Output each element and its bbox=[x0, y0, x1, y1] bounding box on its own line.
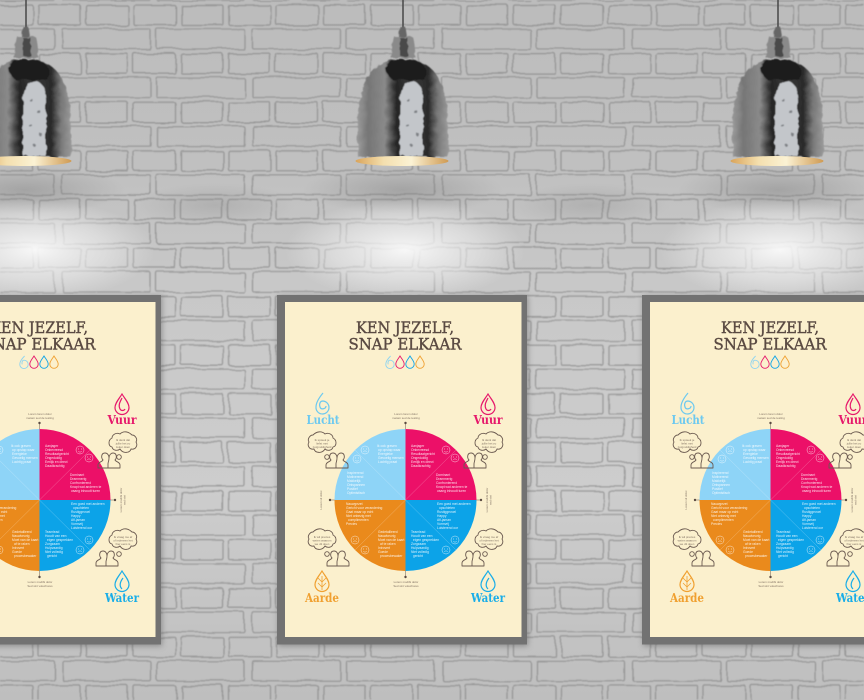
poster: right: Dominant bbox=[801, 473, 815, 477]
poster: left: hier eens is bbox=[116, 542, 131, 546]
poster: right: Rustiggevoel bbox=[802, 510, 821, 514]
poster: left: Confronterend bbox=[70, 481, 91, 485]
poster: left: af te raken bbox=[14, 542, 30, 546]
poster: left: Houdt van een bbox=[45, 534, 67, 538]
poster: right: eigen gesprekken bbox=[778, 538, 804, 542]
pie chart: four quadrants bbox=[334, 429, 476, 571]
poster: left: Teamlead bbox=[45, 530, 59, 534]
title: SNAP ELKAAR bbox=[348, 336, 463, 354]
quadrant text: Optimistisch bbox=[347, 491, 365, 495]
poster: left: Luisterend oor bbox=[71, 526, 93, 530]
title bbox=[348, 319, 463, 354]
quadrant text: Moet van de kaart bbox=[378, 538, 404, 542]
poster: left: Lorem lorem dolor bbox=[28, 412, 52, 416]
poster: left: eigen gesprekken bbox=[47, 538, 73, 542]
poster: left: gericht bbox=[47, 554, 57, 558]
poster: right: jullie het zo bbox=[846, 442, 862, 446]
poster: left: Moet van de kaart bbox=[12, 538, 38, 542]
poster: left: Lorem modibi dolor bbox=[119, 488, 123, 512]
poster: left: procesbewaker bbox=[14, 554, 37, 558]
poster: right: Ongeduldig bbox=[776, 456, 793, 460]
quadrant text: Introvert bbox=[378, 546, 390, 550]
poster: left: Ik denk dat bbox=[116, 438, 130, 442]
thought cloud text: Ik vraag me af bbox=[480, 535, 498, 539]
quadrant text: vaang inhoudt turen bbox=[437, 489, 466, 493]
thought cloud text: zorgvuldigheid bbox=[313, 445, 332, 449]
quadrant text: complimenten bbox=[348, 518, 369, 522]
poster: right: Goede bbox=[743, 550, 753, 554]
quadrant text: Dominant bbox=[436, 473, 450, 477]
quadrant text: Houdt van een bbox=[411, 534, 433, 538]
poster: left: Vormvrij bbox=[71, 522, 83, 526]
poster: left: Onbevreesd bbox=[45, 448, 63, 452]
axis captions: metam sed de testing bbox=[392, 416, 420, 420]
poster: right: Happy bbox=[802, 514, 812, 518]
title: KEN JEZELF, bbox=[356, 319, 454, 337]
poster: right: Nauwgezet bbox=[711, 502, 728, 506]
quadrant text: Teamlead bbox=[411, 530, 425, 534]
poster: right: Niet onbezig met bbox=[711, 514, 736, 518]
element icons bbox=[315, 393, 495, 592]
quadrant text: Niet volledig bbox=[411, 550, 429, 554]
quadrant text: Ik ook graven bbox=[377, 444, 397, 448]
poster: right: Ik denk dat bbox=[847, 438, 861, 442]
quadrant text: Gaat maar op echt bbox=[346, 510, 373, 514]
poster: left: Daadkrachtig bbox=[45, 464, 65, 468]
quadrant text: af te raken bbox=[380, 542, 396, 546]
poster: right: Lucht bbox=[672, 412, 705, 427]
poster: right: Drammerig bbox=[801, 477, 817, 481]
poster: left: Energieke bbox=[12, 452, 27, 456]
poster: right: Gevoelig mensen bbox=[743, 456, 769, 460]
poster: left: Hulpvaardig bbox=[45, 546, 63, 550]
poster: left: Dominant bbox=[70, 473, 84, 477]
poster: right: Moet van de kaart bbox=[743, 538, 769, 542]
poster: right: Eerlijk en direct bbox=[776, 460, 799, 464]
poster: right: Een goed met anderen bbox=[802, 502, 836, 506]
quadrant text: eigen gesprekken bbox=[413, 538, 439, 542]
poster: right: weten waarom bbox=[678, 538, 697, 542]
quadrant text: Energieke bbox=[378, 452, 393, 456]
poster: right: sed sint bbox=[854, 495, 858, 505]
quadrant text: gericht bbox=[413, 554, 423, 558]
poster: left: of iedereen het bbox=[113, 538, 133, 542]
thought cloud text: Ik spreek je bbox=[315, 438, 330, 442]
axis captions: Sed sint vulechores bbox=[393, 584, 419, 588]
poster: right: Zorgzaam bbox=[776, 542, 791, 546]
poster: left: Gevoelig mensen bbox=[12, 456, 38, 460]
poster: right: Houdt van een bbox=[776, 534, 798, 538]
poster: right: Ik spreek je bbox=[680, 438, 695, 442]
poster: right: Precies bbox=[711, 522, 722, 526]
quadrant text: Daadkrachtig bbox=[411, 464, 431, 468]
axis captions: Lorem modibi dolor bbox=[485, 488, 489, 512]
quadrant text: Happy bbox=[437, 514, 447, 518]
poster: right: Sed sint vulechores bbox=[758, 584, 784, 588]
thought cloud text: Ik wil precies bbox=[314, 535, 331, 539]
quadrant text: Confronterend bbox=[436, 481, 457, 485]
thought cloud text: of iedereen het bbox=[479, 538, 499, 542]
poster: left: Drammerig bbox=[70, 477, 86, 481]
poster: right: Niet volledig bbox=[776, 550, 794, 554]
poster: right: op opstap waar bbox=[743, 448, 766, 452]
poster: right: Afi-jaman bbox=[802, 518, 816, 522]
poster: right: Optimistisch bbox=[712, 491, 730, 495]
poster: left bbox=[0, 295, 162, 646]
poster: right: Ik vraag me af bbox=[845, 535, 863, 539]
quadrant text: Drammerig bbox=[436, 477, 452, 481]
lamp: right bbox=[730, 0, 824, 166]
quadrant text: Gedetailleerd bbox=[378, 530, 398, 534]
thought cloud text: weten waarom bbox=[313, 538, 332, 542]
poster: right: Energieke bbox=[743, 452, 758, 456]
poster: right: Teamlead bbox=[776, 530, 790, 534]
poster: left: opschieten bbox=[73, 506, 89, 510]
poster: right: Makkelijk bbox=[712, 479, 726, 483]
thought cloud text: zeker doen bbox=[482, 445, 497, 449]
poster: right: Introvert bbox=[743, 546, 755, 550]
poster: left: Ik ook graven bbox=[11, 444, 31, 448]
poster: right: of iedereen het bbox=[844, 538, 864, 542]
quadrant text: opschieten bbox=[439, 506, 455, 510]
poster: left: metam sed de testing bbox=[26, 416, 54, 420]
quadrant text: Luchtig praat bbox=[378, 460, 397, 464]
element labels: Lucht bbox=[306, 412, 340, 427]
poster: right: complimenten bbox=[713, 518, 734, 522]
poster: left: jullie het zo bbox=[115, 442, 131, 446]
quadrant text: Rustiggevoel bbox=[437, 510, 456, 514]
axes bbox=[329, 422, 482, 578]
poster: left: Goede bbox=[12, 550, 22, 554]
poster: right: Ik wil precies bbox=[679, 535, 696, 539]
poster: left: Introvert bbox=[12, 546, 24, 550]
quadrant text: Resultaatgericht bbox=[411, 452, 435, 456]
poster: right: Knapt wat anderen te bbox=[801, 485, 833, 489]
quadrant text: Ongeduldig bbox=[411, 456, 428, 460]
quadrant text: Eerlijk en direct bbox=[411, 460, 434, 464]
poster: right: Gedetailleerd bbox=[743, 530, 763, 534]
poster: right: Nauwkeurig bbox=[743, 534, 761, 538]
poster: right: liefst met bbox=[681, 442, 693, 446]
poster: right: metam sed de testing bbox=[757, 416, 785, 420]
poster: right: gericht bbox=[778, 554, 788, 558]
thought cloud text: jullie het zo bbox=[481, 442, 497, 446]
quadrant text: Ontspannen bbox=[347, 483, 365, 487]
poster: left: Niet volledig bbox=[45, 550, 63, 554]
poster: right: KEN JEZELF, bbox=[721, 319, 819, 337]
poster: right: Gaat maar op echt bbox=[711, 510, 738, 514]
poster: left: Ongeduldig bbox=[45, 456, 62, 460]
poster: right: Confronterend bbox=[801, 481, 822, 485]
poster: left: Nauwkeurig bbox=[12, 534, 30, 538]
quadrant text: Onbevreesd bbox=[411, 448, 429, 452]
poster: right: Ontspannen bbox=[712, 483, 730, 487]
poster: right: Luisterend oor bbox=[802, 526, 824, 530]
quadrant text: Vormvrij bbox=[437, 522, 449, 526]
poster: right: we dit doen bbox=[680, 542, 695, 546]
poster: left: Water bbox=[104, 590, 139, 605]
quadrant text: Nauwgezet bbox=[346, 502, 363, 506]
poster: left: vaang inhoudt turen bbox=[71, 489, 100, 493]
quadrant text: Makkelijk bbox=[347, 479, 361, 483]
quadrant text: Goede bbox=[378, 550, 388, 554]
poster: left: op opstap waar bbox=[12, 448, 35, 452]
quadrant text: Nauwkeurig bbox=[378, 534, 396, 538]
quadrant text: Gevoelig mensen bbox=[378, 456, 404, 460]
poster: right: Daadkrachtig bbox=[776, 464, 796, 468]
quadrant text: Motiverend bbox=[347, 475, 363, 479]
smiley icons bbox=[351, 446, 459, 554]
element labels: Water bbox=[470, 590, 505, 605]
poster: right: Aanjager bbox=[776, 444, 790, 448]
thought cloud text: liefst met bbox=[316, 442, 328, 446]
quadrant text: Inspirerend bbox=[347, 471, 364, 475]
poster: right: SNAP ELKAAR bbox=[714, 336, 828, 354]
thought clouds and people icons bbox=[308, 432, 503, 566]
axis captions: Lorem sit dolor bbox=[319, 490, 323, 510]
poster: right: zeker doen bbox=[847, 445, 862, 449]
poster: right: Onbevreesd bbox=[776, 448, 794, 452]
quadrant text bbox=[346, 444, 471, 558]
poster: left: Knapt wat anderen te bbox=[70, 485, 102, 489]
poster: left: Vuur bbox=[107, 412, 137, 427]
lamp: centre bbox=[356, 0, 449, 166]
lamp: left bbox=[0, 0, 72, 166]
poster: right: Ik ook graven bbox=[742, 444, 762, 448]
poster: left: Lorem modibi dolor bbox=[28, 580, 52, 584]
axis captions: Lorem modibi dolor bbox=[394, 580, 418, 584]
poster: right: Lorem modibi dolor bbox=[759, 580, 783, 584]
poster: left: Ik vraag me af bbox=[114, 535, 132, 539]
quadrant text: op opstap waar bbox=[378, 448, 401, 452]
quadrant text: Positief bbox=[347, 487, 358, 491]
poster: left: Luchtig praat bbox=[12, 460, 31, 464]
poster: right: Vormvrij bbox=[802, 522, 814, 526]
poster: left: Aanjager bbox=[45, 444, 59, 448]
axis captions: Lorem lorem dolor bbox=[394, 412, 418, 416]
poster: left: Afi-jaman bbox=[71, 518, 85, 522]
quadrant text: Niet onbezig met bbox=[346, 514, 371, 518]
poster: right: Lorem sit dolor bbox=[684, 490, 688, 510]
poster: right: Motiverend bbox=[712, 475, 728, 479]
poster: left: Eerlijk en direct bbox=[45, 460, 68, 464]
quadrant text: Afi-jaman bbox=[437, 518, 451, 522]
poster frame bbox=[277, 295, 528, 646]
poster: right: Lorem modibi dolor bbox=[850, 488, 854, 512]
poster: left: Zorgzaam bbox=[45, 542, 60, 546]
poster: left: Happy bbox=[71, 514, 81, 518]
poster: right: vaang inhoudt turen bbox=[802, 489, 831, 493]
thought cloud text: Ik denk dat bbox=[482, 438, 496, 442]
poster: left: Resultaatgericht bbox=[45, 452, 69, 456]
thought cloud text: we dit doen bbox=[315, 542, 330, 546]
poster: left: zeker doen bbox=[116, 445, 131, 449]
poster: right: opschieten bbox=[804, 506, 820, 510]
poster: right: Aarde bbox=[669, 590, 704, 605]
poster: right: Hulpvaardig bbox=[776, 546, 794, 550]
quadrant text: Zorgzaam bbox=[411, 542, 426, 546]
poster: centre bbox=[277, 295, 528, 646]
quadrant text: Hulpvaardig bbox=[411, 546, 429, 550]
quadrant text: Aanjager bbox=[411, 444, 425, 448]
poster: left: Gedetailleerd bbox=[12, 530, 32, 534]
element labels: Aarde bbox=[304, 590, 339, 605]
poster: right: Luchtig praat bbox=[743, 460, 762, 464]
poster: right: Gericht voor verandering bbox=[711, 506, 747, 510]
poster: left: Sed sint vulechores bbox=[27, 584, 53, 588]
poster: right bbox=[642, 295, 864, 646]
element labels bbox=[304, 412, 505, 605]
poster: right: zorgvuldigheid bbox=[678, 445, 697, 449]
poster: right: Resultaatgericht bbox=[776, 452, 800, 456]
axis captions: sed sint bbox=[488, 495, 492, 505]
poster: right: af te raken bbox=[745, 542, 761, 546]
quadrant text: Precies bbox=[346, 522, 357, 526]
quadrant text: Luisterend oor bbox=[437, 526, 459, 530]
poster: left: Een goed met anderen bbox=[71, 502, 105, 506]
poster: right: Lorem lorem dolor bbox=[759, 412, 783, 416]
axis captions bbox=[319, 412, 492, 588]
poster: left: Rustiggevoel bbox=[71, 510, 90, 514]
poster: right: procesbewaker bbox=[745, 554, 768, 558]
thought cloud text: hier eens is bbox=[482, 542, 497, 546]
quadrant text: Een goed met anderen bbox=[437, 502, 471, 506]
quadrant text: procesbewaker bbox=[380, 554, 403, 558]
poster: right: hier eens is bbox=[847, 542, 862, 546]
element labels: Vuur bbox=[473, 412, 503, 427]
poster: right: Positief bbox=[712, 487, 723, 491]
poster: left: sed sint bbox=[122, 495, 126, 505]
quadrant text: Gericht voor verandering bbox=[346, 506, 382, 510]
quadrant text: Knapt wat anderen te bbox=[436, 485, 468, 489]
icon row: four drops bbox=[386, 356, 424, 369]
poster: right: Inspirerend bbox=[712, 471, 729, 475]
